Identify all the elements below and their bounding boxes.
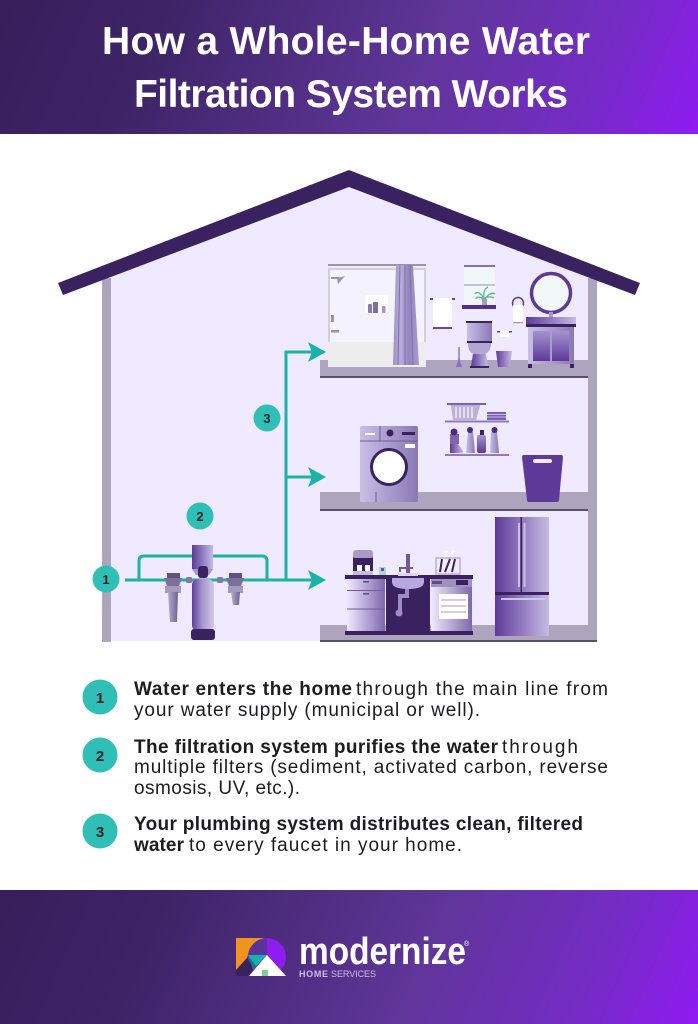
- shower curtain: [393, 265, 419, 365]
- laundry shelves: [445, 403, 509, 456]
- step 1 text: through the main line from: [356, 679, 608, 700]
- footer band: [0, 890, 698, 1024]
- step 1 text: Water enters the home: [134, 679, 352, 700]
- logo mark: [236, 938, 286, 976]
- diagram badge 3: 3: [263, 411, 271, 426]
- laundry hamper: [522, 455, 563, 502]
- diagram badge 1: 1: [102, 572, 110, 587]
- step 2 badge: 2: [96, 748, 104, 765]
- step 2 badge: [82, 738, 118, 772]
- step 2: [82, 737, 608, 799]
- house interior: [111, 180, 588, 641]
- step 1: [82, 679, 608, 721]
- step 3 text: water: [133, 835, 185, 856]
- step 1 text: your water supply (municipal or well).: [134, 700, 480, 721]
- diagram badge 3: [254, 404, 280, 432]
- toilet brush: [456, 347, 462, 367]
- registered mark: ®: [464, 940, 470, 948]
- title: [102, 20, 590, 116]
- logo: [236, 931, 470, 979]
- step 1 badge: [82, 680, 118, 714]
- title: How a Whole-Home Water: [102, 20, 590, 63]
- coffee maker: [353, 550, 373, 575]
- floor slab: middle: [320, 492, 588, 511]
- step 3 text: Your plumbing system distributes clean, filtered: [134, 814, 583, 835]
- bathroom vanity: [526, 317, 576, 368]
- diagram badge 1: [92, 566, 120, 592]
- step 2 text: [134, 737, 608, 799]
- arrow: to laundry: [308, 467, 326, 487]
- logo tagline: SERVICES: [331, 969, 376, 979]
- hanging towel: [430, 298, 455, 329]
- toilet paper holder: [497, 331, 512, 337]
- step 1 badge: 1: [96, 690, 104, 707]
- floor slab: lower: [320, 625, 597, 642]
- bathroom shower and tub: [328, 264, 426, 367]
- title: Filtration System Works: [134, 73, 568, 116]
- refrigerator: [495, 517, 549, 636]
- right wall: [588, 278, 597, 642]
- header band: [0, 0, 698, 134]
- arrow: to kitchen: [308, 570, 326, 590]
- arrow: to bathroom: [308, 342, 326, 362]
- step 3: [82, 814, 583, 856]
- step 3 text: to every faucet in your home.: [189, 835, 462, 856]
- left wall: [102, 278, 111, 642]
- logo wordmark: modernize: [299, 931, 466, 973]
- step 3 badge: [82, 814, 118, 848]
- round mirror: [532, 274, 570, 318]
- step 1 text: [134, 679, 608, 721]
- floor slab: upper: [320, 360, 588, 378]
- step 3 text: [133, 814, 583, 856]
- step 2 text: multiple filters (sediment, activated carbon, reverse: [134, 757, 608, 778]
- roof: [58, 170, 640, 295]
- kitchen faucet: [400, 554, 413, 573]
- diagram badge 2: [186, 502, 214, 530]
- waste bin: [496, 351, 512, 367]
- logo tagline: [299, 969, 376, 979]
- logo tagline: HOME: [299, 969, 328, 979]
- window with plant: [462, 265, 496, 309]
- water pipes: [125, 352, 312, 580]
- step 3 badge: 3: [96, 824, 104, 841]
- house illustration: [58, 170, 640, 642]
- step 2 text: through: [502, 737, 578, 758]
- step 2 text: osmosis, UV, etc.).: [134, 778, 300, 799]
- towel ring: [512, 298, 524, 323]
- dish rack: [436, 551, 460, 574]
- filtration system: [164, 545, 244, 640]
- diagram badge 2: 2: [196, 509, 204, 524]
- washing machine: [360, 426, 418, 502]
- kitchen counter and sink: [345, 573, 473, 635]
- toilet: [466, 321, 492, 368]
- soap glass: [379, 567, 386, 575]
- step 2 text: The filtration system purifies the water: [134, 737, 499, 758]
